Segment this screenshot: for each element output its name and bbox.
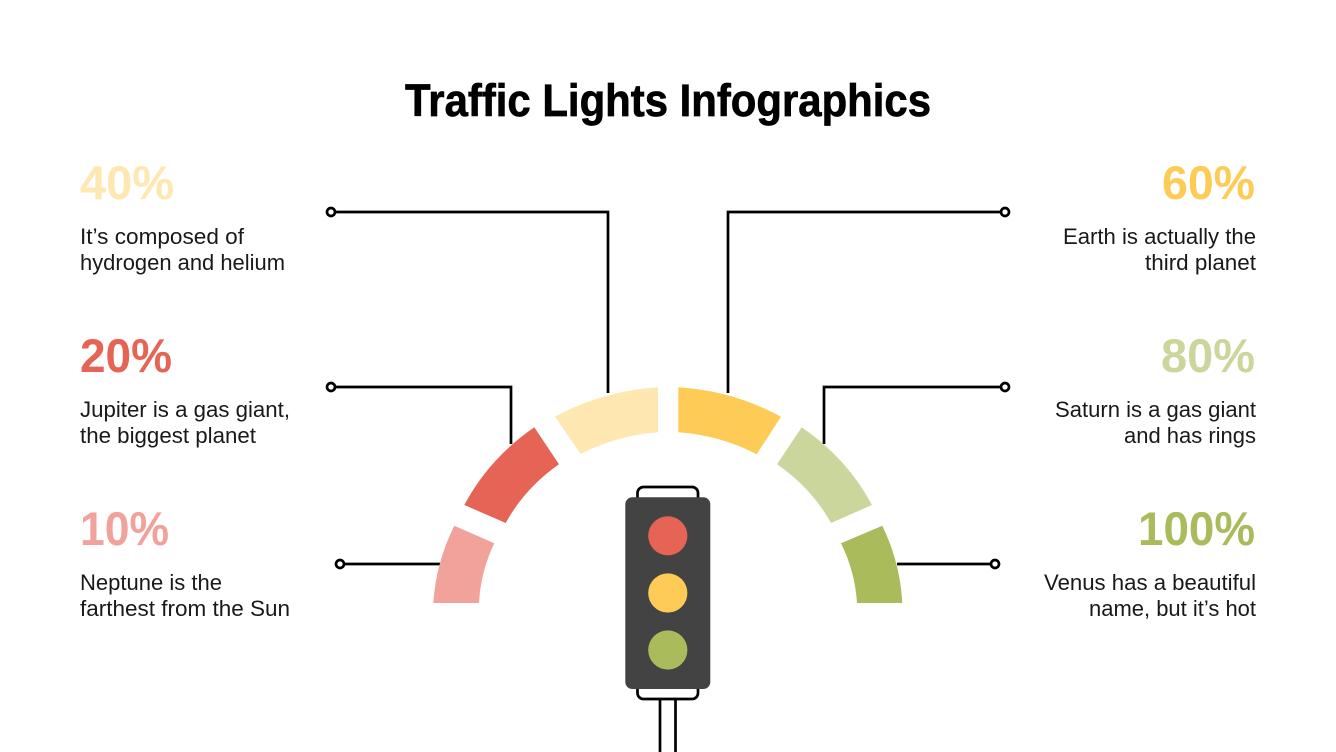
arc segment: cream (555, 387, 658, 454)
text block: 80% (1055, 329, 1256, 448)
arc segment: light green (777, 427, 872, 523)
bottom handle (638, 688, 698, 699)
text block: 80%: Saturn is a gas giant (1055, 397, 1256, 422)
arc segment: red (464, 427, 559, 523)
text block: 20%: Jupiter is a gas giant, (80, 397, 290, 422)
text block: 60%: Earth is actually the (1063, 224, 1256, 249)
text block: 10%: farthest from the Sun (80, 596, 290, 621)
text block: 20% (80, 329, 290, 448)
text block: 100% (1044, 502, 1256, 621)
text block: 60%: 60% (1162, 156, 1255, 209)
connector: yellow segment to 60% (728, 208, 1009, 393)
text block: 10%: Neptune is the (80, 570, 222, 595)
red light (648, 516, 687, 555)
yellow light (648, 573, 687, 613)
connector: green segment to 100% (897, 560, 999, 568)
icon: traffic light (625, 487, 710, 752)
text block: 40%: It’s composed of (80, 224, 245, 249)
text block: 40%: 40% (80, 156, 174, 209)
text block: 100%: name, but it’s hot (1089, 596, 1256, 621)
housing (625, 497, 710, 689)
title: Traffic Lights Infographics (405, 75, 931, 126)
gauge arc (433, 387, 902, 603)
text block: 10% (80, 502, 290, 621)
text block: 100%: 100% (1138, 502, 1255, 555)
text block: 80%: and has rings (1124, 423, 1256, 448)
connector: pink segment to 10% (336, 560, 440, 568)
top handle (638, 487, 698, 498)
green light (648, 630, 687, 670)
connector: red segment to 20% (327, 383, 511, 444)
text block: 40% (80, 156, 285, 275)
pole (660, 698, 676, 752)
text block: 60% (1063, 156, 1256, 275)
text block: 80%: 80% (1161, 329, 1255, 382)
connector: cream segment to 40% (327, 208, 608, 393)
text block: 100%: Venus has a beautiful (1044, 570, 1256, 595)
arc segment: green (841, 526, 902, 603)
text block: 20%: 20% (80, 329, 172, 382)
text block: 20%: the biggest planet (80, 423, 256, 448)
arc segment: pink (433, 526, 494, 603)
connector: light green segment to 80% (824, 383, 1009, 444)
text block: 60%: third planet (1145, 250, 1256, 275)
text block: 10%: 10% (80, 502, 169, 555)
text block: 40%: hydrogen and helium (80, 250, 285, 275)
arc segment: yellow (678, 387, 781, 454)
